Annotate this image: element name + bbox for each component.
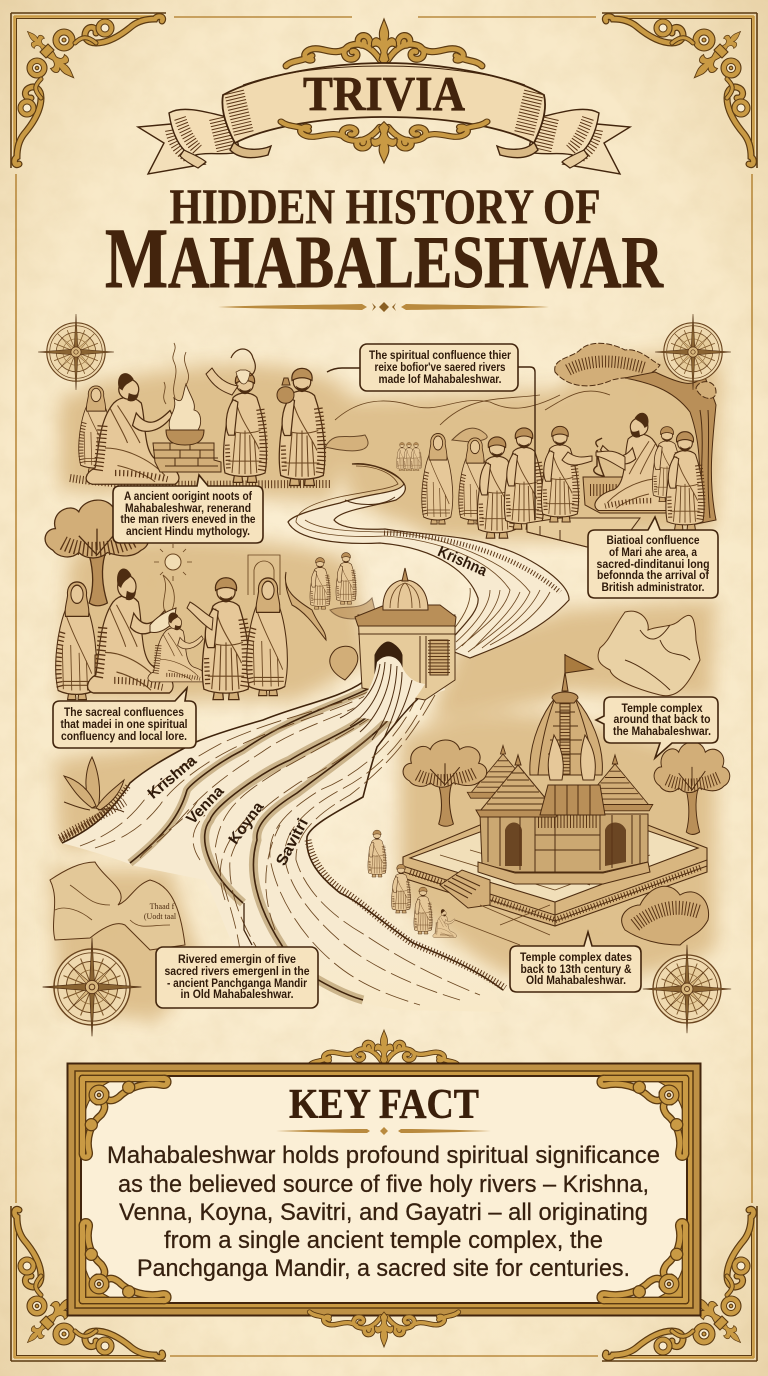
map label: Thaad f	[150, 902, 175, 911]
distant hills	[325, 391, 610, 471]
visitor seated	[433, 909, 457, 938]
callout: local lore	[53, 688, 196, 748]
callout: local lore: that madei in one spiritual	[60, 717, 188, 731]
callout: ancient origin: A ancient oorigint noots of	[124, 489, 253, 503]
title divider	[218, 302, 549, 312]
callout: five rivers: sacred rivers emergenl in the	[164, 964, 310, 978]
rear attendant	[652, 427, 682, 502]
river label: Savitri: Savitri	[273, 816, 312, 869]
callout: five rivers: Rivered emergin of five	[178, 952, 296, 966]
pilgrim three	[477, 437, 517, 538]
panel frame	[68, 1064, 700, 1316]
callout: British arrival: befonnda the arrival of	[597, 568, 710, 582]
callout: spiritual confluence: made lof Mahabaleshwar.	[378, 372, 502, 386]
flourish above banner	[286, 19, 482, 66]
callout: British arrival: sacred-dinditanui long	[596, 557, 710, 571]
callout: local lore: The sacreal confluences	[64, 705, 184, 719]
callout: British arrival: Biatioal confluence	[606, 533, 700, 547]
pilgrim one	[422, 434, 453, 524]
scene: pilgrims and seated ruler	[422, 343, 716, 547]
seated queen	[88, 569, 176, 693]
temple tree right	[654, 742, 730, 834]
compass top left	[38, 314, 114, 390]
pilgrim two	[459, 438, 490, 524]
callout: ancient origin: Mahabaleshwar, renerand	[125, 501, 251, 515]
callout: ancient origin: the man rivers eneved in the	[120, 512, 256, 526]
temple tree left	[403, 740, 487, 826]
visitor two	[414, 887, 432, 934]
seated woman	[79, 386, 112, 472]
callout: five rivers: in Old Mahabaleshwar.	[180, 987, 294, 1001]
panel text: Mahabaleshwar holds profound spiritual significance	[107, 1142, 660, 1169]
scene: royal gathering	[45, 500, 376, 700]
five rivers delta	[60, 668, 505, 1012]
paving lines	[455, 905, 550, 945]
callout: British arrival	[588, 517, 718, 598]
callout: British arrival: British administrator.	[602, 580, 704, 594]
callout: British arrival: of Mari ahe area, a	[609, 545, 697, 559]
map label: (Uodt taal	[144, 912, 177, 921]
panel text: Panchganga Mandir, a sacred site for centuries.	[137, 1255, 630, 1282]
main pavilion roof	[476, 755, 560, 817]
callout: local lore: confluency and local lore.	[61, 729, 187, 743]
flourish below banner	[281, 122, 487, 163]
trivia banner	[138, 19, 630, 174]
panel: key fact	[68, 1030, 700, 1347]
callout: spiritual confluence: reixe bofior've saered rivers	[374, 360, 506, 374]
courtyard platform	[403, 822, 707, 926]
map fragment upper right	[598, 611, 700, 696]
woman praying	[247, 578, 287, 696]
stone plinth	[527, 518, 640, 547]
shikhara tower	[530, 654, 602, 780]
callout: temple complex dates: Temple complex dates	[520, 950, 632, 964]
ornament above panel	[310, 1030, 458, 1065]
river label: Venna: Venna	[183, 783, 228, 828]
title	[105, 178, 664, 306]
temple body	[478, 814, 650, 884]
tree	[45, 500, 149, 606]
banner word: TRIVIA	[303, 66, 466, 121]
ribbon	[138, 63, 630, 174]
scene: fire ritual	[70, 343, 330, 486]
standing man	[187, 578, 250, 700]
callout: ancient origin	[113, 475, 263, 543]
seated child	[148, 613, 207, 682]
ornament below panel	[310, 1312, 458, 1347]
river label: Koyna: Koyna	[225, 799, 268, 848]
callout: spiritual confluence	[327, 344, 535, 520]
fire altar	[153, 343, 221, 472]
man offering	[541, 426, 604, 522]
courtyard visitors	[392, 864, 410, 913]
lone visitor	[368, 830, 386, 877]
left woman	[56, 582, 96, 700]
distant arch	[248, 555, 280, 595]
panel text: from a single ancient temple complex, the	[164, 1227, 603, 1254]
left pavilion roof	[467, 746, 539, 798]
callout: temple complex upper: around that back to	[614, 712, 710, 726]
small riverside shrine	[355, 568, 456, 700]
title line one: HIDDEN HISTORY OF	[170, 178, 600, 234]
seated sage	[86, 373, 179, 484]
callout: temple complex dates: back to 13th century &	[520, 962, 632, 976]
upper river: Krishna	[288, 464, 569, 658]
panel text: as the believed source of five holy rivers – Krishna,	[118, 1171, 649, 1198]
steps	[440, 870, 490, 908]
river label: Krishna upper: Krishna	[435, 543, 490, 580]
panel divider	[276, 1127, 491, 1135]
shrub	[330, 646, 358, 680]
callout: five rivers	[156, 947, 318, 1008]
sun	[154, 544, 192, 581]
compass bottom left	[43, 938, 141, 1036]
callout: spiritual confluence: The spiritual confluence thier	[369, 348, 511, 362]
right pavilion roof	[577, 755, 653, 811]
king with raised hand	[206, 349, 266, 482]
callout: temple complex dates	[510, 932, 641, 992]
pilgrim four	[504, 428, 544, 529]
compass bottom right	[643, 945, 731, 1033]
compass top right	[655, 314, 731, 390]
panel text	[107, 1142, 660, 1282]
sepia washes	[50, 353, 720, 1020]
panel heading: KEY FACT	[289, 1082, 479, 1128]
river label: Krishna lower: Krishna	[145, 752, 200, 803]
main temple complex	[368, 654, 730, 945]
plant lower left	[60, 757, 125, 838]
panel text: Venna, Koyna, Savitri, and Gayatri – all originating	[119, 1199, 648, 1226]
waterfall from arch	[340, 656, 425, 740]
throne and ruler	[583, 413, 677, 513]
callout: temple complex upper: the Mahabaleshwar.	[613, 724, 711, 738]
callout: temple complex upper: Temple complex	[622, 701, 703, 715]
attendant with urn	[277, 368, 325, 486]
callout: ancient origin: ancient Hindu mythology.	[126, 524, 250, 538]
callout: five rivers: - ancient Panchganga Mandir	[167, 976, 307, 990]
shrub bottom right	[622, 886, 709, 945]
illustrated map	[45, 343, 730, 1020]
map fragment lower left	[50, 862, 185, 950]
callout: temple complex upper	[596, 697, 718, 758]
tree with spreading branches	[555, 343, 716, 525]
attendant with bowl	[666, 432, 704, 530]
bathers	[285, 553, 376, 640]
callout: temple complex dates: Old Mahabaleshwar.	[526, 973, 626, 987]
roof eave and tower base	[540, 785, 605, 815]
ground shading	[70, 478, 330, 485]
